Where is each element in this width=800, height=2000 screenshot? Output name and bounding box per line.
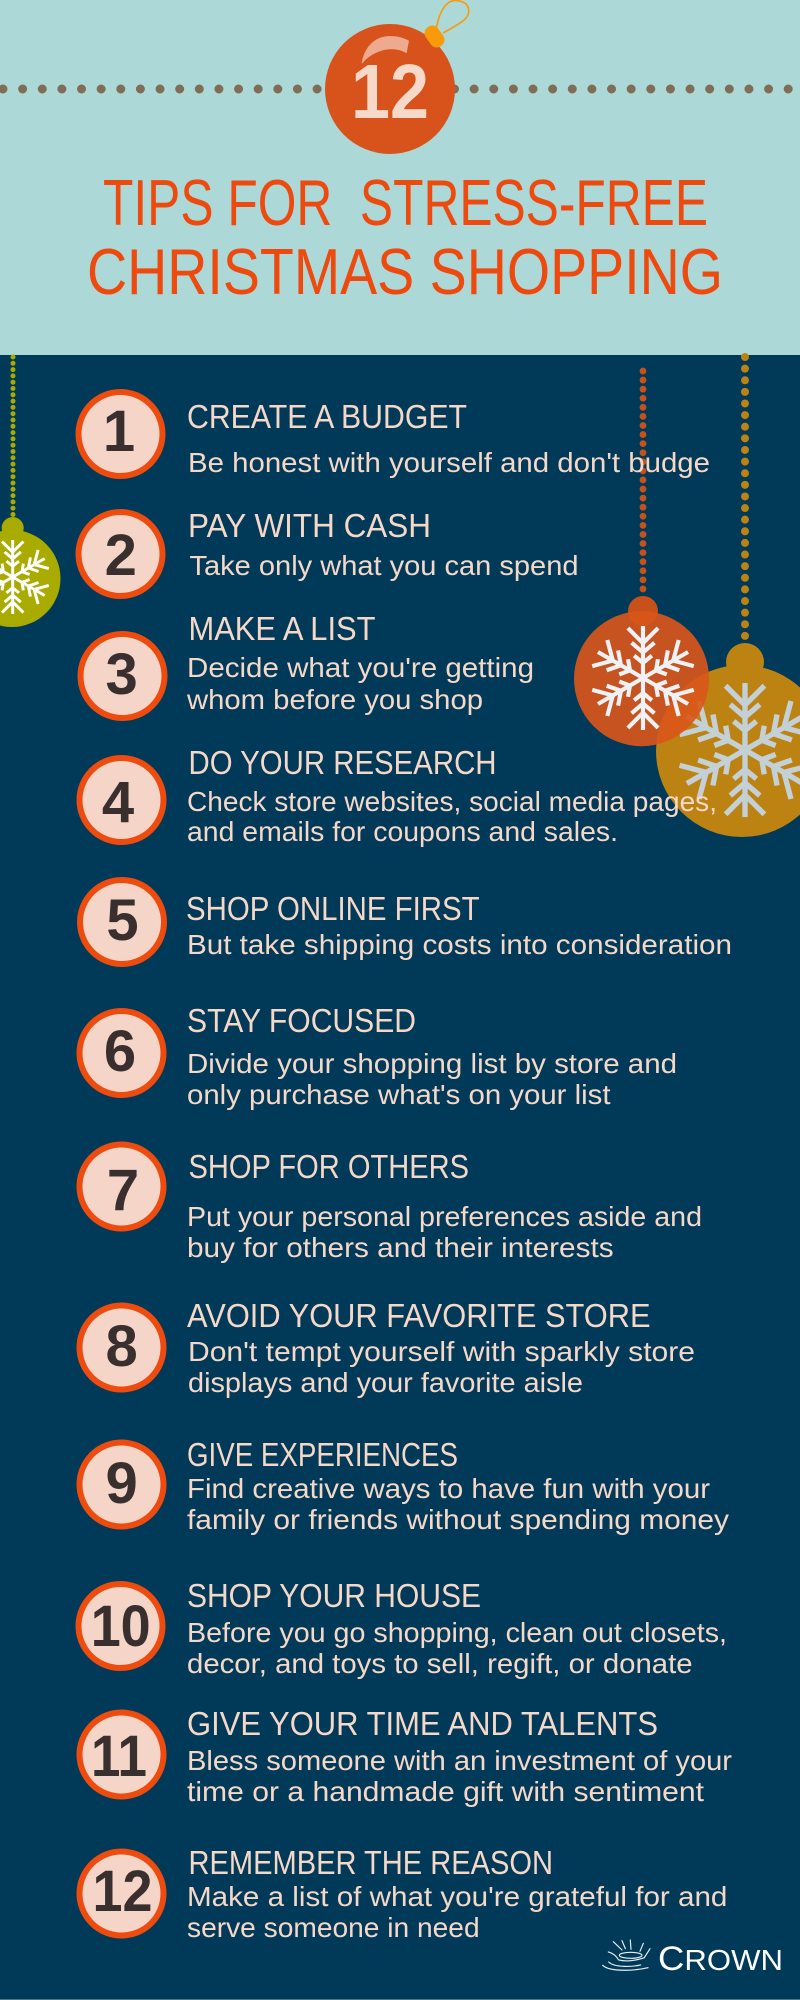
tip 11: Bless someone with an investment of your (187, 1745, 732, 1776)
tip 12: serve someone in need (187, 1912, 480, 1943)
ornament: red bauble (574, 371, 709, 746)
tip 6 (80, 1002, 677, 1110)
tip 4: DO YOUR RESEARCH (188, 744, 496, 781)
tip 4: and emails for coupons and sales. (187, 816, 618, 847)
tip 7: SHOP FOR OTHERS (188, 1148, 469, 1185)
tip 8: displays and your favorite aisle (188, 1367, 583, 1398)
tip 8: 8 (105, 1314, 138, 1379)
tip 12: REMEMBER THE REASON (188, 1844, 553, 1881)
tip 7: Put your personal preferences aside and (187, 1201, 702, 1232)
tip 11: GIVE YOUR TIME AND TALENTS (187, 1705, 658, 1742)
header band (0, 0, 800, 355)
tip 8 (80, 1297, 695, 1398)
tip 10: SHOP YOUR HOUSE (187, 1577, 481, 1614)
tip 4 (80, 744, 717, 847)
tip 1 (78, 392, 710, 478)
tip 1: Be honest with yourself and don't budge (188, 447, 710, 478)
tip 7 (80, 1144, 702, 1263)
tip 12: 12 (92, 1859, 152, 1924)
tip 10 (78, 1577, 727, 1679)
icon: crown splash (603, 1940, 650, 1970)
tip 9: GIVE EXPERIENCES (187, 1436, 458, 1473)
tip 8: Don't tempt yourself with sparkly store (188, 1336, 695, 1367)
tip 3: 3 (105, 642, 138, 707)
tip 10: decor, and toys to sell, regift, or donate (187, 1648, 693, 1679)
tip 9: Find creative ways to have fun with your (187, 1473, 710, 1504)
tip 10: 10 (91, 1594, 151, 1659)
tip 6: only purchase what's on your list (187, 1079, 611, 1110)
tip 4: Check store websites, social media pages, (187, 786, 717, 817)
ornament: gold bauble (656, 357, 800, 837)
tip 2: 2 (105, 523, 137, 588)
tip 10: Before you go shopping, clean out closets, (187, 1617, 727, 1648)
tip 3: whom before you shop (186, 684, 483, 715)
ornament: green bauble (0, 357, 60, 627)
tip 11 (80, 1705, 732, 1807)
tip 3 (80, 610, 534, 718)
tip 5: 5 (106, 888, 139, 953)
tip 2: PAY WITH CASH (188, 507, 431, 544)
tip 8: AVOID YOUR FAVORITE STORE (187, 1297, 651, 1334)
tip 11: time or a handmade gift with sentiment (187, 1776, 704, 1807)
header ornament with number 12: 12 (351, 49, 429, 135)
tip 7: buy for others and their interests (187, 1232, 614, 1263)
tip 9 (80, 1436, 729, 1535)
logo: Crown: CROWN (658, 1940, 783, 1978)
tip 1: CREATE A BUDGET (187, 398, 467, 435)
tip 6: Divide your shopping list by store and (187, 1048, 677, 1079)
tip 12: Make a list of what you're grateful for and (187, 1881, 727, 1912)
tip 9: 9 (105, 1451, 138, 1516)
tip 12 (80, 1844, 727, 1943)
tip 7: 7 (107, 1158, 139, 1223)
logo: Crown (603, 1940, 783, 1978)
tip 6: STAY FOCUSED (187, 1002, 416, 1039)
tip 3: MAKE A LIST (188, 610, 376, 647)
title (87, 166, 723, 308)
tip 11: 11 (91, 1724, 147, 1789)
tip 4: 4 (102, 770, 134, 835)
tip 1: 1 (103, 399, 135, 464)
header ornament with number 12 (325, 1, 469, 154)
tip 9: family or friends without spending money (187, 1504, 729, 1535)
tip 3: Decide what you're getting (187, 652, 534, 683)
tip 2 (78, 507, 578, 596)
tip 6: 6 (104, 1019, 136, 1084)
tip 5: SHOP ONLINE FIRST (186, 890, 480, 927)
tip 2: Take only what you can spend (190, 550, 578, 581)
tip 5: But take shipping costs into consideration (187, 929, 732, 960)
tip 5 (80, 880, 732, 964)
